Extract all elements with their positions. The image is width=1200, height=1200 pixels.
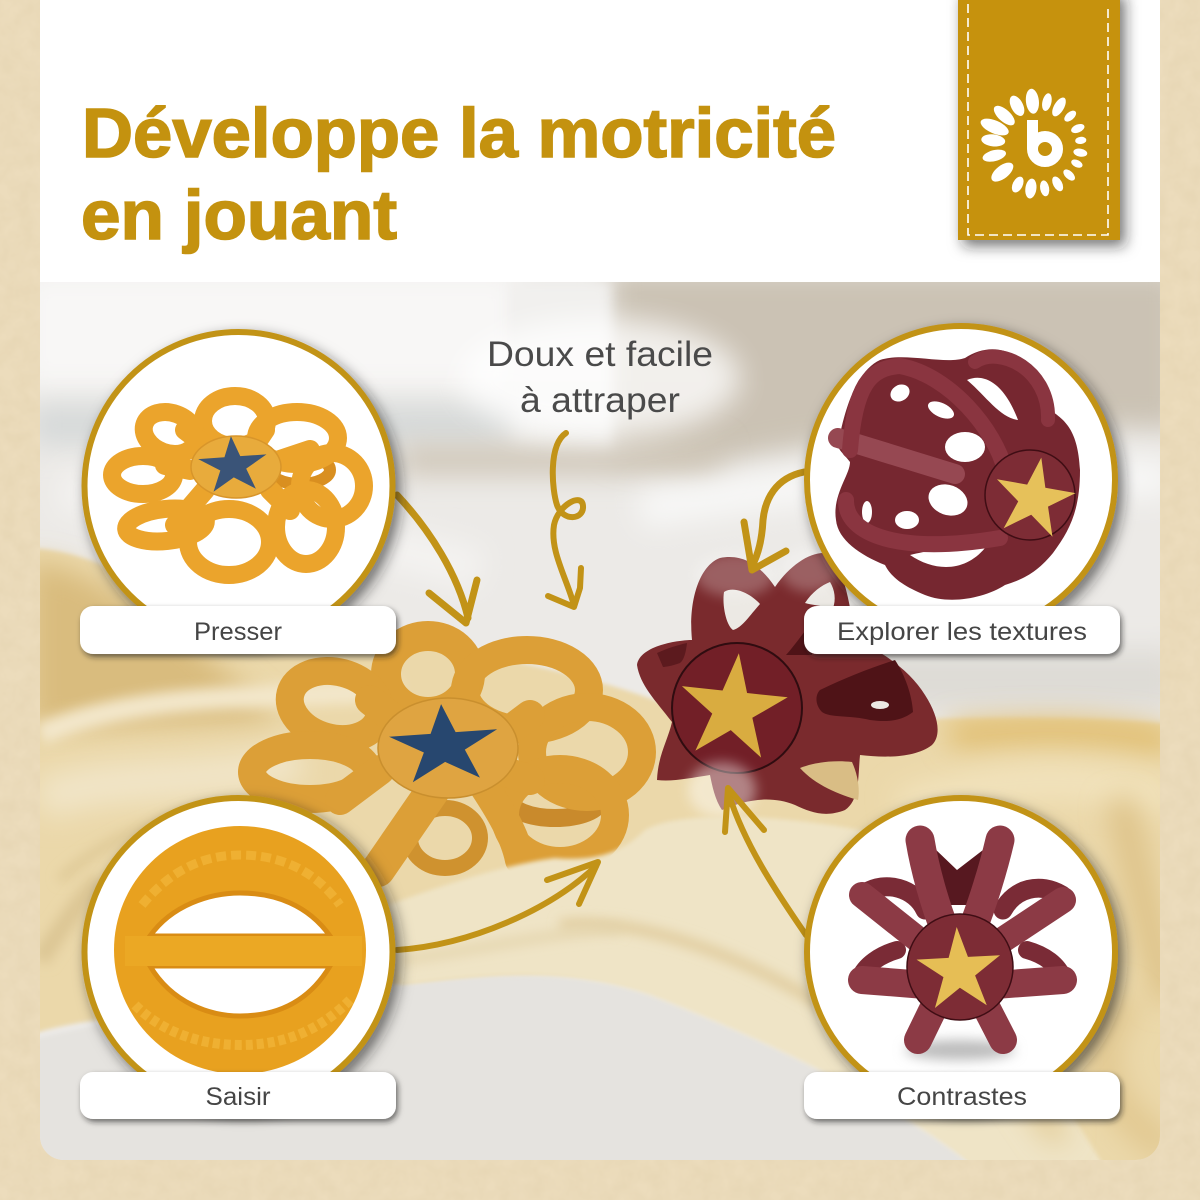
yellow star	[675, 648, 792, 760]
label: Contrastes	[804, 1072, 1120, 1119]
arrow: textures to ball	[744, 472, 804, 570]
label: Saisir	[80, 1072, 396, 1119]
white sheet at bottom	[408, 975, 524, 986]
badge: Contrastes star ball	[807, 798, 1115, 1106]
hub	[378, 698, 518, 798]
room and sheet	[20, 270, 1180, 1162]
cream blanket fold in front of toys	[388, 800, 1170, 1175]
glow behind caption	[460, 318, 740, 438]
large maroon ball toy	[637, 548, 938, 818]
arrow: Contrastes to ball	[725, 788, 806, 935]
caption: Doux et facile à attraper	[487, 335, 713, 420]
caption: Doux et facile à attraper: Doux et facile	[487, 335, 713, 374]
title: Développe la motricité	[82, 94, 836, 172]
arrow: Presser to toy	[397, 495, 477, 623]
caption: Doux et facile à attraper: à attraper	[520, 381, 680, 420]
label: Contrastes: Contrastes	[897, 1083, 1027, 1111]
title	[81, 94, 836, 254]
label: Explorer les textures	[804, 606, 1120, 654]
badge: Explorer les textures ball	[807, 326, 1115, 634]
navy star	[387, 700, 500, 784]
photo background scene	[20, 270, 1180, 1175]
badge: Presser flower	[84, 332, 392, 640]
badge: Saisir sphere	[84, 798, 392, 1106]
brand ribbon with logo	[958, 0, 1120, 240]
large orange flower toy	[252, 636, 642, 870]
label: Saisir: Saisir	[206, 1083, 270, 1111]
white header panel	[40, 0, 1160, 283]
label: Explorer les textures: Explorer les textures	[837, 618, 1087, 646]
arrow: curly caption arrow	[548, 433, 583, 607]
title: en jouant	[81, 176, 397, 254]
arrow: Saisir to toy	[397, 862, 598, 950]
yellow blanket	[30, 548, 1180, 1175]
label: Presser: Presser	[194, 618, 282, 646]
logo: sunflower b	[978, 88, 1088, 199]
label: Presser	[80, 606, 396, 654]
